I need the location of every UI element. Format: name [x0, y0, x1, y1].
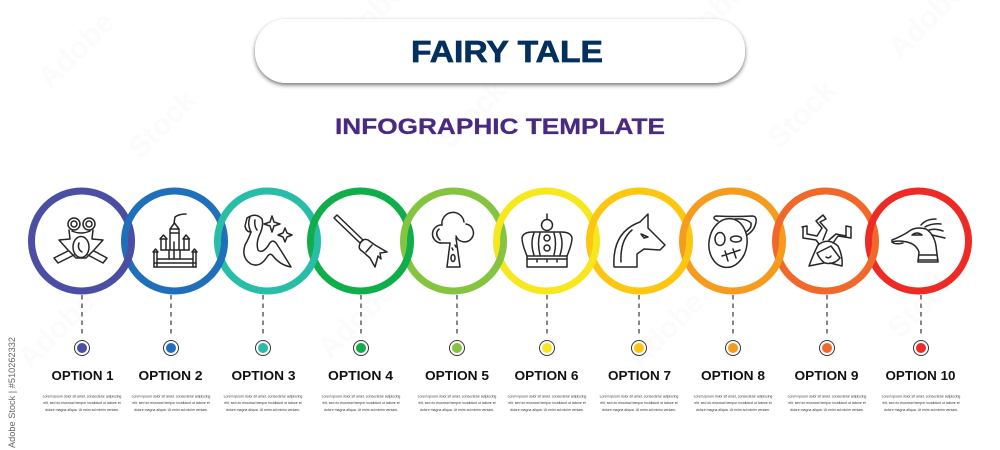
option descriptions: Lorem ipsum dolor sit amet, consectetur adipiscing — [224, 394, 302, 398]
option descriptions: elit, sed do eiusmod tempor incididunt ut labore et — [132, 401, 210, 405]
icon: upside-down woman — [802, 215, 851, 266]
text: Stock — [432, 74, 513, 155]
option markers — [74, 340, 928, 356]
text: Adobe — [312, 276, 401, 365]
icon: castle — [153, 214, 197, 267]
text: Stock — [762, 74, 843, 155]
option descriptions: Lorem ipsum dolor sit amet, consectetur adipiscing — [788, 394, 866, 398]
option descriptions: elit, sed do eiusmod tempor incididunt ut labore et — [43, 401, 121, 405]
option descriptions: elit, sed do eiusmod tempor incididunt ut labore et — [600, 401, 678, 405]
option descriptions: elit, sed do eiusmod tempor incididunt ut labore et — [322, 401, 400, 405]
title: FAIRY TALE — [411, 34, 603, 69]
option descriptions: elit, sed do eiusmod tempor incididunt ut labore et — [788, 401, 866, 405]
option descriptions: dolore magna aliqua. Ut enim ad minim veniam. — [790, 408, 864, 412]
icon: mask — [706, 216, 756, 270]
option descriptions: Lorem ipsum dolor sit amet, consectetur adipiscing — [132, 394, 210, 398]
option descriptions: dolore magna aliqua. Ut enim ad minim veniam. — [510, 408, 584, 412]
option labels: OPTION 3 — [232, 368, 296, 383]
option descriptions: elit, sed do eiusmod tempor incididunt ut labore et — [418, 401, 496, 405]
option descriptions: Lorem ipsum dolor sit amet, consectetur adipiscing — [418, 394, 496, 398]
subtitle: INFOGRAPHIC TEMPLATE — [335, 114, 665, 139]
icon: frog — [54, 218, 107, 263]
title pill — [255, 19, 745, 83]
option descriptions: elit, sed do eiusmod tempor incididunt ut labore et — [224, 401, 302, 405]
option descriptions: dolore magna aliqua. Ut enim ad minim veniam. — [45, 408, 119, 412]
icon: crown — [522, 214, 572, 267]
option labels: OPTION 5 — [425, 368, 489, 383]
option labels: OPTION 7 — [608, 368, 671, 383]
option labels: OPTION 9 — [794, 368, 858, 383]
option labels: OPTION 1 — [52, 368, 114, 383]
option descriptions: dolore magna aliqua. Ut enim ad minim veniam. — [602, 408, 676, 412]
text: Stock — [122, 84, 203, 165]
option descriptions — [43, 394, 960, 412]
option labels: OPTION 4 — [328, 368, 394, 383]
icon: broom — [334, 215, 387, 267]
option labels: OPTION 8 — [701, 368, 765, 383]
option descriptions: dolore magna aliqua. Ut enim ad minim veniam. — [134, 408, 208, 412]
icon: tree — [432, 212, 473, 267]
option labels: OPTION 2 — [138, 368, 202, 383]
icon: griffin bird head — [892, 219, 945, 262]
text: Stock — [882, 264, 963, 345]
option descriptions: elit, sed do eiusmod tempor incididunt ut labore et — [694, 401, 772, 405]
stock id side text: Adobe Stock | #510262332 — [7, 337, 18, 448]
option descriptions: elit, sed do eiusmod tempor incididunt ut labore et — [882, 401, 960, 405]
option descriptions: Lorem ipsum dolor sit amet, consectetur adipiscing — [508, 394, 586, 398]
ring chain — [32, 191, 968, 291]
option descriptions: Lorem ipsum dolor sit amet, consectetur adipiscing — [882, 394, 960, 398]
dashed connectors — [82, 295, 921, 336]
option labels — [52, 368, 956, 383]
option descriptions: dolore magna aliqua. Ut enim ad minim veniam. — [420, 408, 494, 412]
option labels: OPTION 10 — [886, 368, 956, 383]
icon: serpent with stars — [244, 215, 292, 267]
option descriptions: elit, sed do eiusmod tempor incididunt ut labore et — [508, 401, 586, 405]
text: Adobe — [12, 286, 101, 375]
text: Adobe — [622, 286, 711, 375]
option descriptions: Lorem ipsum dolor sit amet, consectetur adipiscing — [600, 394, 678, 398]
option descriptions: dolore magna aliqua. Ut enim ad minim veniam. — [884, 408, 958, 412]
option labels: OPTION 6 — [514, 368, 578, 383]
option descriptions: dolore magna aliqua. Ut enim ad minim veniam. — [226, 408, 300, 412]
option descriptions: dolore magna aliqua. Ut enim ad minim veniam. — [696, 408, 770, 412]
text: Adobe — [32, 6, 121, 95]
icon: jackal head — [614, 214, 665, 267]
option descriptions: Lorem ipsum dolor sit amet, consectetur adipiscing — [322, 394, 400, 398]
option descriptions: dolore magna aliqua. Ut enim ad minim veniam. — [324, 408, 398, 412]
option descriptions: Lorem ipsum dolor sit amet, consectetur adipiscing — [694, 394, 772, 398]
option descriptions: Lorem ipsum dolor sit amet, consectetur adipiscing — [43, 394, 121, 398]
